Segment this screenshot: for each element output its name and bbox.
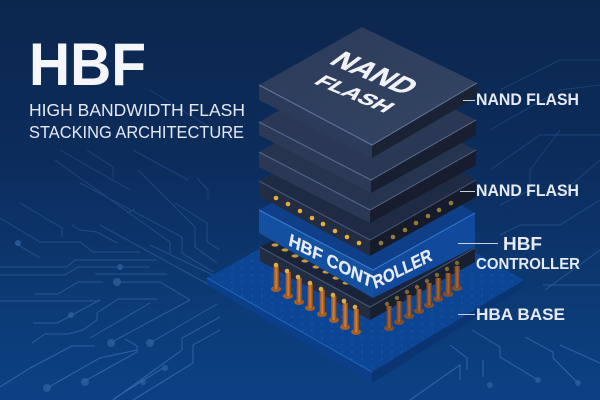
label: HBA base: HBA BASE <box>476 305 565 324</box>
panel: HBF controller layer <box>259 150 475 298</box>
solder dots <box>274 196 361 245</box>
contact row <box>272 243 350 285</box>
subtitle: HIGH BANDWIDTH FLASH <box>29 100 245 120</box>
subtitle <box>29 100 245 142</box>
panel: NAND layer 2 <box>259 63 476 193</box>
panel: NAND layer 3 <box>259 93 476 223</box>
label: NAND FLASH lower: NAND FLASH <box>476 182 579 200</box>
copper pins <box>271 261 462 335</box>
panel: NAND layer 4 <box>259 122 476 256</box>
label: HBF controller: HBF <box>503 234 542 254</box>
controller label: ROLLER <box>370 245 434 293</box>
label: HBF controller <box>458 234 580 273</box>
panel: title block <box>29 31 245 142</box>
panel: connector layer <box>260 190 475 320</box>
chip label <box>309 48 425 116</box>
label: NAND FLASH upper: NAND FLASH <box>476 91 579 109</box>
chip label: FLASH <box>309 72 400 116</box>
panel: HBA base plate <box>207 190 524 383</box>
chip label: NAND <box>322 48 425 100</box>
circuit nodes <box>15 240 581 392</box>
title: HBF <box>29 31 146 98</box>
label: HBF controller: CONTROLLER <box>476 256 580 273</box>
panel: NAND top chip <box>259 27 477 158</box>
subtitle: STACKING ARCHITECTURE <box>29 122 244 142</box>
controller label: HBF CONT <box>287 230 375 292</box>
controller label <box>287 230 434 293</box>
